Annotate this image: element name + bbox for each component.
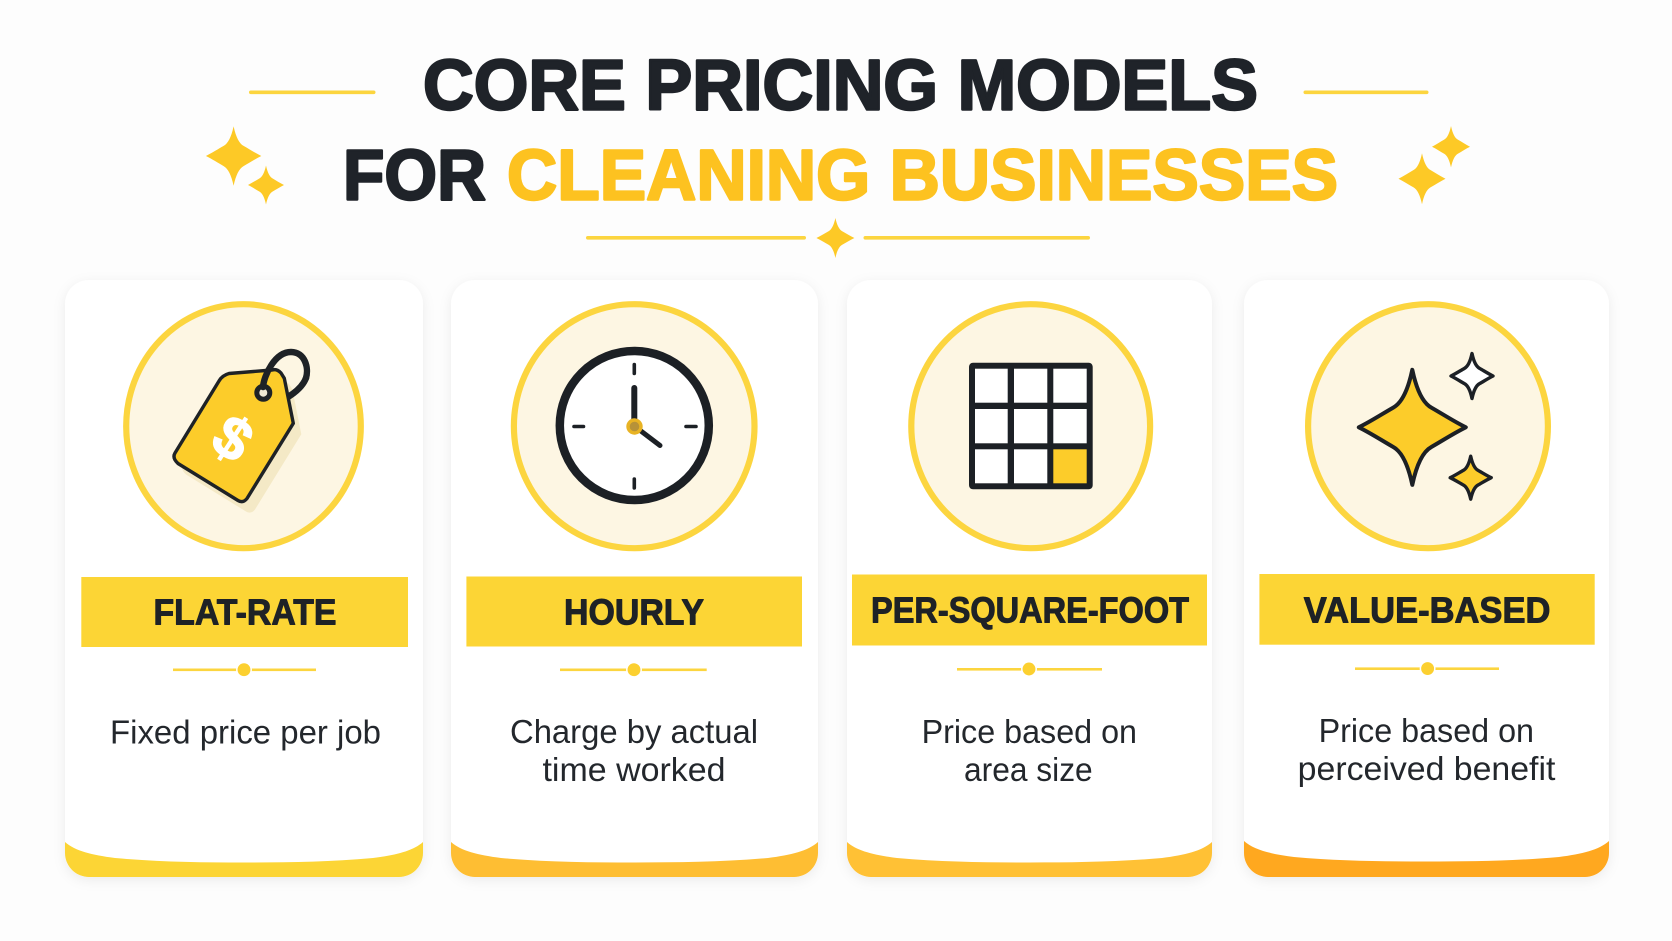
- card bottom band: [1244, 841, 1609, 877]
- icon: grid: [969, 363, 1093, 489]
- plan name banner: [852, 574, 1207, 646]
- card bottom band: [65, 842, 423, 877]
- header: [206, 46, 1470, 258]
- title accent line left: [249, 90, 376, 94]
- panel: flat-rate: [65, 280, 423, 877]
- description: perceived benefit: [1298, 750, 1555, 787]
- plan name banner: [466, 576, 802, 646]
- divider: [1355, 661, 1499, 676]
- title line 1: CORE PRICING MODELS: [423, 46, 1258, 126]
- sparkles left: [206, 126, 284, 204]
- plan name banner: [1259, 574, 1595, 645]
- icon: price tag: $: [200, 401, 265, 476]
- divider: [560, 662, 707, 677]
- card background: [847, 280, 1212, 877]
- plan name banner: HOURLY: [564, 592, 704, 633]
- description: Price based on: [1319, 712, 1534, 749]
- description: [510, 713, 758, 788]
- icon: price tag: [174, 352, 307, 513]
- title line 2: CLEANING BUSINESSES: [507, 136, 1338, 216]
- plan name banner: FLAT-RATE: [154, 592, 336, 633]
- divider: [957, 662, 1102, 676]
- sparkles right: [1398, 126, 1470, 204]
- panel: hourly: [451, 280, 818, 877]
- panel: per-square-foot: [847, 280, 1212, 877]
- description: [922, 713, 1137, 788]
- icon: clock: [560, 351, 709, 500]
- plan name banner: VALUE-BASED: [1304, 589, 1550, 630]
- icon circle: [514, 304, 754, 548]
- icon circle: [1308, 304, 1548, 548]
- divider: [173, 662, 316, 677]
- card background: [451, 280, 818, 877]
- description: Charge by actual: [510, 713, 758, 750]
- description: Fixed price per job: [110, 714, 381, 750]
- plan name banner: [81, 577, 408, 647]
- icon: sparkles: [1359, 354, 1493, 499]
- title accent line right: [1304, 90, 1428, 94]
- panel: value-based: [1244, 280, 1609, 877]
- card background: [65, 280, 423, 877]
- description: [1298, 712, 1555, 787]
- description: area size: [964, 751, 1093, 788]
- icon circle: [126, 304, 361, 548]
- description: Price based on: [922, 713, 1137, 750]
- icon circle: [911, 304, 1150, 548]
- plan name banner: PER-SQUARE-FOOT: [871, 590, 1189, 631]
- title underline with sparkle: [586, 218, 1090, 258]
- card background: [1244, 280, 1609, 877]
- title line 2: FOR: [343, 136, 486, 216]
- card bottom band: [847, 842, 1212, 877]
- description: time worked: [542, 751, 726, 788]
- card bottom band: [451, 842, 818, 877]
